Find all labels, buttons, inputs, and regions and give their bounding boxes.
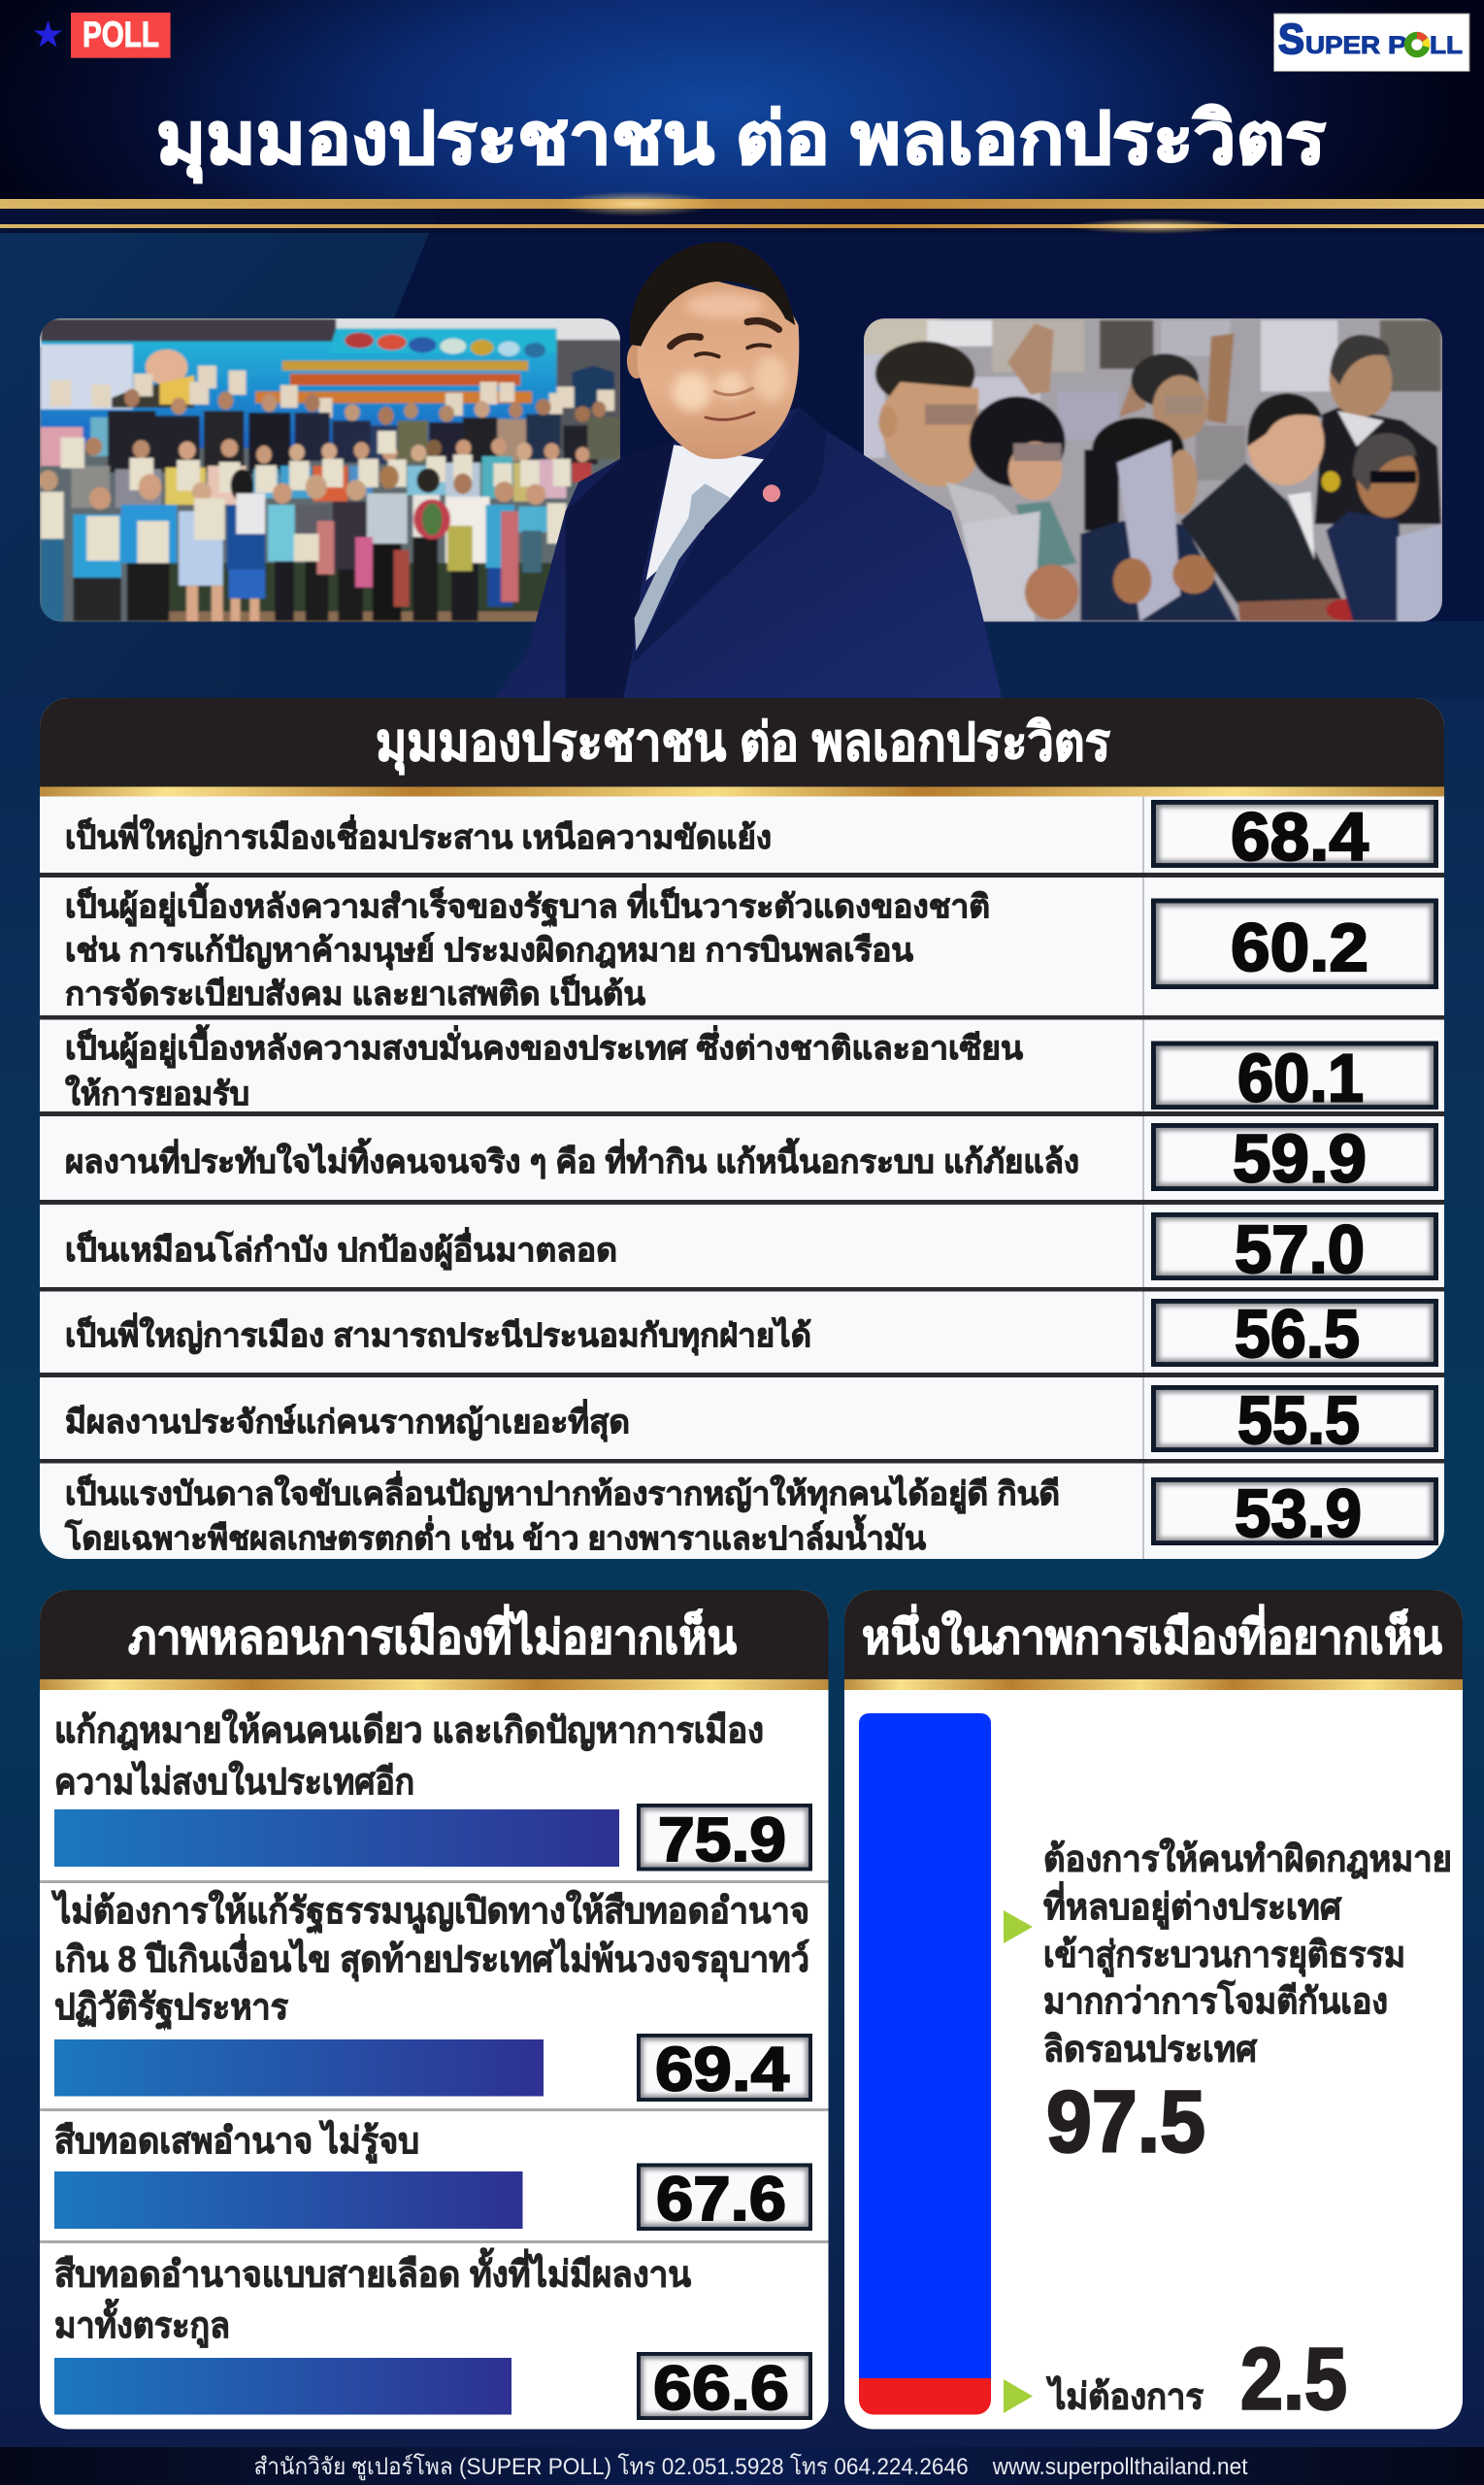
footer: สำนักวิจัย ซูเปอร์โพล (SUPER POLL) โทร 02.051.5928 โทร 064.224.2646 www.superpollthailand.net [254, 2453, 1248, 2481]
item 3: 67.6 [656, 2164, 786, 2234]
text: wants justice: ต้องการให้คนทำผิดกฎหมาย [1043, 1837, 1452, 1879]
row 8: โดยเฉพาะพืชผลเกษตรตกต่ำ เช่น ข้าว ยางพาราและปาล์มน้ำมัน [64, 1514, 926, 1556]
ear [627, 343, 646, 379]
facial highlights [673, 293, 787, 411]
facial features [671, 321, 778, 419]
item 3 [54, 2119, 812, 2234]
stacked bar [859, 1713, 991, 2415]
arrow: wants [1004, 1910, 1033, 1943]
row 7: มีผลงานประจักษ์แก่คนรากหญ้าเยอะที่สุด [65, 1399, 630, 1442]
left gold rule [40, 1679, 829, 1690]
face [638, 275, 799, 459]
item 4: มาทั้งตระกูล [54, 2299, 230, 2348]
right panel heading: หนึ่งในภาพการเมืองที่อยากเห็น [862, 1604, 1442, 1664]
title: มุมมองประชาชน ต่อ พลเอกประวิตร [156, 98, 1326, 183]
poll badge [34, 13, 171, 58]
table heading: มุมมองประชาชน ต่อ พลเอกประวิตร [376, 713, 1110, 776]
row 2: 60.2 [1231, 910, 1369, 985]
row 6: 56.5 [1235, 1296, 1360, 1372]
row 3: 60.1 [1237, 1041, 1364, 1116]
text: wants justice: เข้าสู่กระบวนการยุติธรรม [1043, 1935, 1405, 1977]
item 4: สืบทอดอำนาจแบบสายเลือด ทั้งที่ไม่มีผลงาน [54, 2248, 691, 2295]
row 2 [65, 882, 1438, 1011]
table header bar [40, 698, 1444, 787]
right panel header [844, 1590, 1463, 1680]
lapel [633, 408, 826, 663]
shirt collar [645, 445, 764, 580]
text: wants justice [1043, 1837, 1452, 2070]
item 2: 69.4 [655, 2035, 789, 2104]
panel: unwanted political illusions [40, 1590, 829, 2429]
photo: crowd holding deeds [862, 317, 1449, 624]
row 4 [65, 1120, 1438, 1196]
row 2: เป็นผู้อยู่เบื้องหลังความสำเร็จของรัฐบาล ที่เป็นวาระตัวแดงของชาติ [65, 882, 990, 927]
suit jacket [495, 408, 1002, 699]
value 2.5: 2.5 [1240, 2332, 1347, 2429]
logo: super poll [1273, 14, 1469, 72]
poll tag text: POLL [82, 15, 159, 54]
row 1: เป็นพี่ใหญ่การเมืองเชื่อมประสาน เหนือความขัดแย้ง [65, 814, 772, 856]
row 8: 53.9 [1235, 1475, 1362, 1551]
necktie [635, 483, 731, 653]
photo: land deed ceremony group [37, 317, 624, 624]
text: does not want: ไม่ต้องการ [1045, 2374, 1204, 2417]
red poll tag [71, 13, 171, 58]
item 4: 66.6 [653, 2353, 789, 2423]
left panel heading: ภาพหลอนการเมืองที่ไม่อยากเห็น [128, 1604, 737, 1664]
row 7: 55.5 [1237, 1382, 1360, 1458]
text: wants justice: ที่หลบอยู่ต่างประเทศ [1043, 1881, 1341, 1930]
hair [630, 242, 795, 347]
row 5: เป็นเหมือนโล่กำบัง ปกป้องผู้อื่นมาตลอด [65, 1227, 617, 1271]
text: wants justice: ลิดรอนประเทศ [1043, 2029, 1257, 2070]
logo: super poll: UPER [1305, 32, 1380, 59]
row 5: 57.0 [1235, 1211, 1365, 1287]
portrait: general prawit [495, 242, 1002, 699]
item 2: ปฏิวัติรัฐประหาร [54, 1987, 288, 2030]
logo: super poll: S [1278, 16, 1304, 63]
row 4: 59.9 [1233, 1120, 1367, 1196]
panel: desired political picture [844, 1590, 1463, 2429]
row 6 [65, 1296, 1438, 1372]
item 2: ไม่ต้องการให้แก้รัฐธรรมนูญเปิดทางให้สืบทอดอำนาจ [50, 1889, 809, 1934]
item 3: สืบทอดเสพอำนาจ ไม่รู้จบ [54, 2119, 419, 2164]
item 2: เกิน 8 ปีเกินเงื่อนไข สุดท้ายประเทศไม่พ้นวงจรอุบาทว์ [54, 1934, 809, 1982]
row 3: ให้การยอมรับ [65, 1075, 249, 1111]
row 1 [65, 799, 1438, 875]
left panel header [40, 1590, 829, 1680]
item 2 [50, 1889, 812, 2104]
gold rule [40, 786, 1444, 796]
lapel pin [763, 484, 780, 502]
item 4 [54, 2248, 812, 2423]
row 6: เป็นพี่ใหญ่การเมือง สามารถประนีประนอมกับทุกฝ่ายได้ [65, 1312, 811, 1356]
row 5 [65, 1211, 1438, 1287]
arrow: does not want [1004, 2379, 1033, 2413]
row 1: 68.4 [1231, 799, 1369, 875]
row 3 [65, 1024, 1438, 1116]
logo: super poll: LL [1430, 32, 1463, 59]
text: wants justice: มากกว่าการโจมตีกันเอง [1043, 1979, 1388, 2021]
row 8 [64, 1471, 1438, 1556]
row 2: เช่น การแก้ปัญหาค้ามนุษย์ ประมงผิดกฎหมาย การบินพลเรือน [65, 932, 913, 971]
row 4: ผลงานที่ประทับใจไม่ทิ้งคนจนจริง ๆ คือ ที่ทำกิน แก้หนี้นอกระบบ แก้ภัยแล้ง [65, 1138, 1079, 1179]
footer [0, 2447, 1484, 2485]
item 1: ความไม่สงบในประเทศอีก [54, 1760, 414, 1802]
row 7 [65, 1382, 1438, 1458]
item 1 [54, 1708, 812, 1874]
icon: star [34, 20, 62, 47]
item 1: 75.9 [658, 1805, 786, 1874]
item 1: แก้กฎหมายให้คนคนเดียว และเกิดปัญหาการเมือง [54, 1708, 764, 1751]
value 97.5: 97.5 [1046, 2073, 1205, 2170]
row 2: การจัดระเบียบสังคม และยาเสพติด เป็นต้น [65, 974, 645, 1011]
panel: public views table [40, 698, 1444, 1559]
row 3: เป็นผู้อยู่เบื้องหลังความสงบมั่นคงของประเทศ ซึ่งต่างชาติและอาเซียน [65, 1024, 1023, 1069]
gold header bands [0, 191, 1484, 234]
right gold rule [844, 1679, 1463, 1690]
logo: super poll: P [1388, 32, 1407, 59]
row 8: เป็นแรงบันดาลใจขับเคลื่อนปัญหาปากท้องรากหญ้าให้ทุกคนได้อยู่ดี กินดี [65, 1471, 1060, 1514]
